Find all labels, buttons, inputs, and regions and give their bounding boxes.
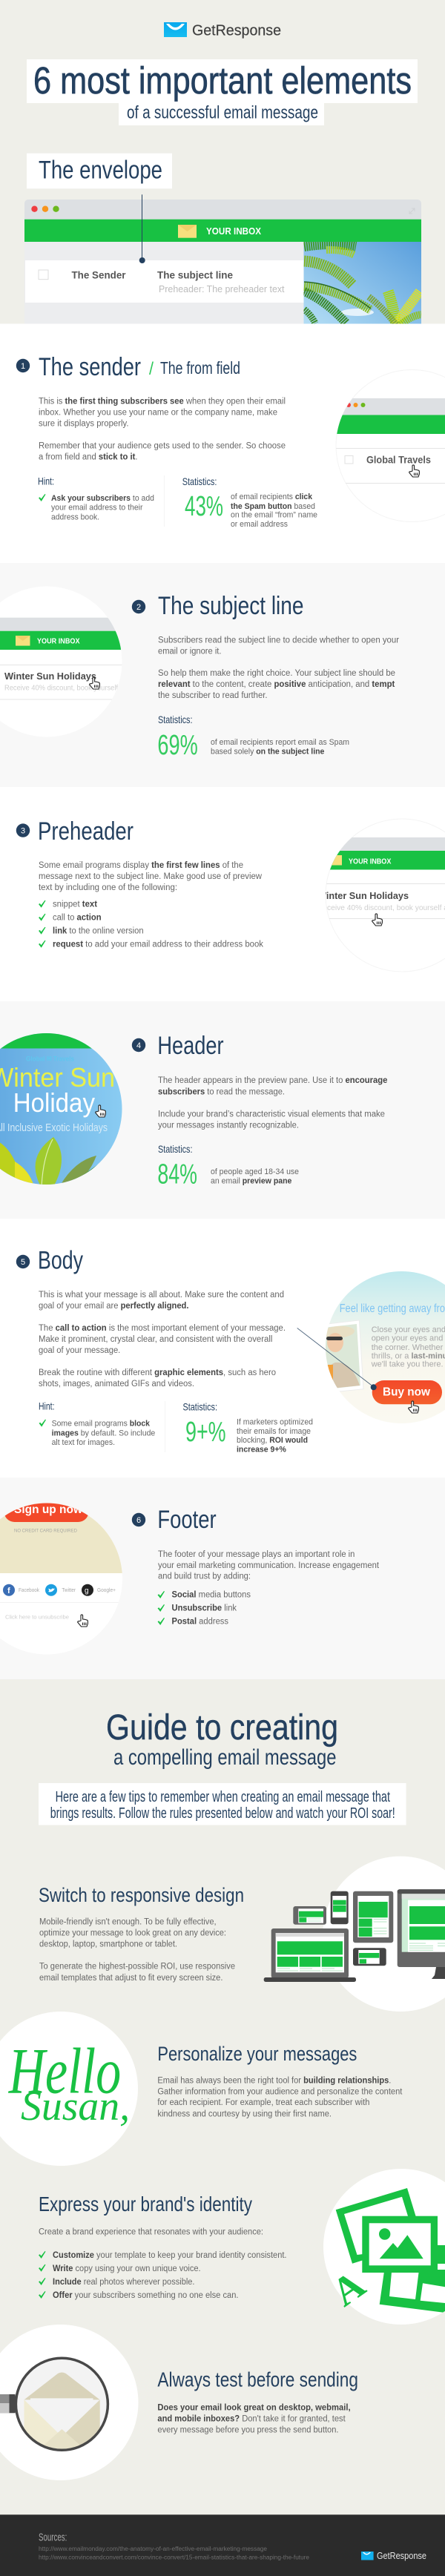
badge 6 — [132, 1513, 145, 1526]
body text: the subscriber to read further. — [158, 691, 267, 700]
illustration: email header magnified: Holiday — [13, 1087, 95, 1118]
panel: guide background — [0, 1679, 445, 2515]
illustration: subject line magnified: YOUR INBOX — [37, 636, 80, 645]
checklist: request to add your email address to their address book — [53, 941, 263, 949]
illustration: email footer magnified — [0, 1503, 122, 1627]
sources: http://www.convinceandconvert.com/convince-convert/15-email-statistics-that-are-shaping-the-future — [39, 2554, 310, 2561]
body text: email or ignore it. — [158, 647, 221, 656]
pointer line to sender — [139, 194, 145, 263]
illustration: email header magnified: Global ✉ Travels — [26, 1055, 74, 1064]
heading: preheader: Preheader — [38, 817, 134, 846]
intro box — [39, 1783, 406, 1825]
badge 3 — [16, 823, 30, 837]
illustration: magnifier over envelope — [0, 2325, 138, 2480]
illustration: preheader magnified: Receive 40% discount, book yourself a — [317, 904, 445, 912]
text: Mobile-friendly isn't enough. To be fully effective, — [39, 1917, 217, 1926]
photo of woman — [326, 1320, 363, 1391]
body text: goal of your email are perfectly aligned. — [39, 1302, 188, 1311]
heading: the envelope: The envelope — [39, 157, 162, 185]
heading: Express your brand's identity — [39, 2193, 252, 2216]
palm photo — [304, 242, 421, 325]
body text: text by including one of the following: — [39, 883, 177, 892]
inbox green bar: YOUR INBOX — [206, 225, 261, 237]
illustration: email footer magnified: NO CREDIT CARD REQUIRED — [14, 1529, 77, 1534]
panel: 3 preheader — [16, 817, 445, 972]
statistics: 84%: of people aged 18-34 use — [211, 1167, 299, 1176]
body text: Break the routine with different graphic elements, such as hero — [39, 1368, 276, 1377]
illustration: sender magnified: Global Travels — [366, 454, 431, 466]
heading: header: Header — [157, 1032, 224, 1060]
body text: and build trust by adding: — [158, 1572, 251, 1581]
sources — [39, 2531, 310, 2561]
badge 6: 6 — [136, 1516, 141, 1525]
body text: So help them make the right choice. Your subject line should be — [158, 669, 395, 678]
badge 5: 5 — [21, 1258, 25, 1267]
checklist: Unsubscribe link — [172, 1604, 237, 1613]
text: and mobile inboxes? Don't take it for granted, test — [157, 2414, 346, 2423]
panel: 5 body — [16, 1246, 445, 1455]
tip: responsive design — [39, 1857, 445, 2012]
illustration: email footer magnified: Twitter — [62, 1588, 76, 1593]
subtitle: of a successful email message — [127, 102, 318, 122]
illustration: hello susan — [0, 2012, 138, 2166]
email row — [25, 260, 304, 303]
inbox green bar — [24, 220, 421, 242]
email row: The subject line — [157, 269, 233, 280]
statistics: 69%: based solely on the subject line — [211, 747, 324, 756]
text — [157, 2076, 403, 2118]
checklist — [157, 1591, 251, 1627]
statistics: 9+%: If marketers optimized — [237, 1418, 313, 1427]
letter A: A — [323, 2262, 373, 2315]
statistics: 9+% — [182, 1400, 313, 1455]
statistics: 69%: of email recipients report email as Spam — [211, 738, 349, 747]
tip: brand identity — [39, 2169, 445, 2325]
button: buy now — [372, 1380, 442, 1404]
badge 2 — [132, 600, 145, 613]
body text — [158, 1076, 387, 1130]
checklist: link to the online version — [53, 927, 144, 936]
badge 1: 1 — [21, 362, 25, 371]
text: To generate the highest-possible ROI, use responsive — [39, 1963, 235, 1971]
text — [157, 2403, 351, 2434]
hint: address book. — [51, 513, 99, 522]
illustration: email footer magnified: g — [85, 1587, 89, 1595]
body text: This is the first thing subscribers see when they open their email — [39, 398, 286, 406]
illustration: email footer magnified: Google+ — [97, 1588, 116, 1593]
body text: Subscribers read the subject line to decide whether to open your — [158, 636, 399, 645]
badge 1 — [16, 359, 30, 372]
body text — [158, 636, 399, 700]
statistics: 43%: or email address — [231, 520, 288, 529]
heading: Switch to responsive design — [39, 1884, 244, 1906]
body text: Remember that your audience gets used to the sender. So choose — [39, 442, 286, 451]
illustration: subject line magnified — [0, 617, 122, 700]
illustration: email footer magnified: f — [7, 1587, 10, 1595]
heading: Personalize your messages — [157, 2043, 357, 2065]
heading: Always test before sending — [157, 2368, 358, 2391]
text — [39, 1917, 235, 1983]
illustration: email body magnified — [320, 1271, 445, 1423]
illustration: preheader magnified: Winter Sun Holidays — [317, 890, 409, 901]
body text: Make it prominent, crystal clear, and consistent with the overall — [39, 1335, 272, 1344]
body text — [39, 398, 286, 461]
illustration: preheader magnified: YOUR INBOX — [349, 857, 391, 866]
right band — [438, 2245, 445, 2264]
statistics: 43%: 43% — [185, 491, 223, 522]
body text: message next to the subject line. Make good use of preview — [39, 872, 263, 881]
heading: footer: Footer — [157, 1506, 217, 1534]
checklist: Postal address — [172, 1618, 228, 1627]
text: email templates that adjust to fit every screen size. — [39, 1974, 222, 1983]
statistics: 43%: of email recipients click — [231, 493, 313, 501]
panel: 6 footer — [0, 1503, 379, 1627]
statistics: 69%: 69% — [157, 730, 198, 761]
illustration: sender magnified — [334, 369, 445, 522]
badge 2: 2 — [136, 603, 141, 612]
hint: your email address to their — [51, 504, 143, 513]
lower frame — [380, 2270, 445, 2313]
text: for each recipient. For example, treat each subscriber with — [157, 2098, 369, 2107]
badge 4: 4 — [136, 1041, 141, 1050]
tip: personalize — [0, 2012, 403, 2166]
body text: Some email programs display the first few lines of the — [39, 861, 243, 870]
badge 3: 3 — [21, 827, 25, 836]
text: optimize your message to look great on any device: — [39, 1929, 226, 1938]
heading: the subject line: The subject line — [158, 592, 304, 620]
panel: inbox window — [24, 194, 421, 325]
email row: The Sender — [71, 269, 126, 280]
body text: This is what your message is all about. Make sure the content and — [39, 1291, 284, 1299]
sources: http://www.emailmonday.com/the-anatomy-of-an-effective-email-marketing-message — [39, 2546, 268, 2552]
body text: Include your brand’s characteristic visual elements that make — [158, 1110, 385, 1119]
subheading: the from field: The from field — [160, 358, 240, 378]
center picture — [362, 2216, 438, 2273]
intro text: Create a brand experience that resonates with your audience: — [39, 2228, 263, 2237]
illustration: brand frames — [323, 2169, 445, 2325]
body text: inbox. Whether you use your name or the company name, make — [39, 408, 277, 417]
logo: GetResponse white: GetResponse — [377, 2551, 426, 2561]
hint — [38, 475, 154, 522]
hint: alt text for images. — [52, 1438, 115, 1447]
checklist: Social media buttons — [172, 1591, 251, 1600]
body text: sure it displays properly. — [39, 420, 129, 429]
badge 5 — [16, 1255, 30, 1268]
button: buy now: Buy now — [383, 1386, 431, 1399]
body text: The call to action is the most important element of your message. — [39, 1324, 286, 1333]
statistics: 9+%: their emails for image — [237, 1427, 311, 1436]
sources: Sources: — [39, 2531, 67, 2543]
email row: Preheader: The preheader text — [159, 283, 285, 294]
checklist — [39, 2251, 286, 2300]
statistics: 43% — [182, 475, 317, 529]
body text: The footer of your message plays an important role in — [158, 1550, 355, 1559]
statistics: 69%: Statistics: — [158, 714, 193, 725]
text: Email has always been the right tool for building relationships. — [157, 2076, 391, 2085]
hint: Ask your subscribers to add — [51, 494, 154, 503]
illustration: email footer magnified: Click here to unsubscribe — [5, 1614, 69, 1621]
desktop monitor — [398, 1889, 445, 1979]
checklist: call to action — [53, 914, 102, 923]
body text: goal of your message. — [39, 1346, 120, 1355]
tip: test before sending — [0, 2325, 358, 2480]
pointer line to button — [297, 1328, 377, 1390]
heading: guide to creating: a compelling email message — [113, 1745, 337, 1770]
body text: relevant to the content, create positive anticipation, and tempt — [158, 680, 395, 689]
statistics: 84%: 84% — [157, 1159, 197, 1190]
badge 4 — [132, 1038, 145, 1052]
statistics: 84%: Statistics: — [158, 1143, 193, 1155]
hint: Hint: — [38, 475, 54, 487]
hint: Hint: — [39, 1400, 55, 1412]
illustration: devices — [264, 1857, 445, 2012]
statistics: 84% — [157, 1143, 299, 1190]
illustration: hello susan: Susan, — [21, 2083, 130, 2129]
laptop — [264, 1928, 356, 1982]
checklist: Offer your subscribers something no one else can. — [53, 2291, 239, 2300]
text: Does your email look great on desktop, webmail, — [157, 2403, 351, 2412]
logo: GetResponse: GetResponse — [192, 22, 281, 39]
illustration: email footer magnified: Facebook — [19, 1588, 39, 1593]
checklist: snippet text — [53, 900, 97, 909]
panel: 2 the subject line — [0, 596, 399, 756]
checklist: Customize your template to keep your brand identity consistent. — [53, 2251, 286, 2260]
tablet — [353, 1891, 393, 1943]
heading: guide to creating — [106, 1708, 338, 1770]
body text: your email marketing communication. Increase engagement — [158, 1561, 380, 1570]
hint — [39, 1400, 155, 1447]
heading: body: Body — [38, 1246, 83, 1274]
hint: Some email programs block — [52, 1420, 151, 1429]
statistics: 43%: the Spam button based — [231, 502, 315, 511]
checklist: Include real photos wherever possible. — [53, 2278, 194, 2287]
logo: GetResponse white — [361, 2551, 426, 2561]
body text: The header appears in the preview pane. Use it to encourage — [158, 1076, 387, 1085]
illustration: email footer magnified: Sign up now — [14, 1503, 83, 1516]
text: desktop, laptop, smartphone or tablet. — [39, 1940, 177, 1949]
body text: shots, images, animated GIFs and videos. — [39, 1380, 194, 1389]
statistics: 9+%: blocking, ROI would — [237, 1436, 308, 1445]
hint: images by default. So include — [52, 1429, 155, 1437]
phone landscape small — [353, 1948, 386, 1966]
heading: the sender: The sender — [39, 353, 141, 381]
heading: guide to creating: Guide to creating — [106, 1708, 338, 1747]
body text: a from field and stick to it. — [39, 452, 138, 461]
statistics: 43%: Statistics: — [182, 475, 217, 487]
statistics: 69% — [157, 714, 349, 761]
illustration: hello susan: Hello — [8, 2035, 121, 2108]
illustration: subject line magnified: Receive 40% discount, book yourself — [4, 685, 118, 693]
statistics: 9+%: increase 9+% — [237, 1446, 286, 1455]
illustration: preheader magnified — [317, 819, 445, 972]
footer bar — [0, 2514, 445, 2576]
statistics: 9+%: 9+% — [185, 1417, 226, 1448]
checklist: Write copy using your own unique voice. — [53, 2264, 201, 2273]
heading: the envelope — [27, 154, 172, 188]
statistics: 84%: an email preview pane — [211, 1177, 291, 1186]
text: kindness and courtesy by using their first name. — [157, 2109, 332, 2118]
illustration: subject line magnified: Winter Sun Holidays — [4, 671, 96, 682]
body text: your messages instantly recognizable. — [158, 1121, 299, 1130]
panel: 4 header — [0, 1033, 387, 1185]
body text — [39, 1291, 286, 1389]
body text — [39, 861, 263, 892]
phone landscape — [293, 1906, 326, 1925]
body text: subscribers to read the message. — [158, 1087, 285, 1096]
panel: 1 the sender — [16, 353, 445, 529]
illustration: email header magnified — [0, 1031, 126, 1187]
checklist — [39, 900, 263, 949]
slash: / — [149, 359, 154, 379]
text: every message before you press the send button. — [157, 2425, 338, 2434]
back frame — [336, 2188, 423, 2264]
statistics: 9+%: Statistics: — [182, 1400, 217, 1412]
body text — [158, 1550, 380, 1581]
phone portrait — [331, 1891, 349, 1924]
illustration: email body magnified: we'll take you there. — [371, 1360, 444, 1369]
text: Gather information from your audience and personalize the content — [157, 2087, 403, 2096]
statistics: 43%: on the email “from” name — [231, 511, 317, 520]
